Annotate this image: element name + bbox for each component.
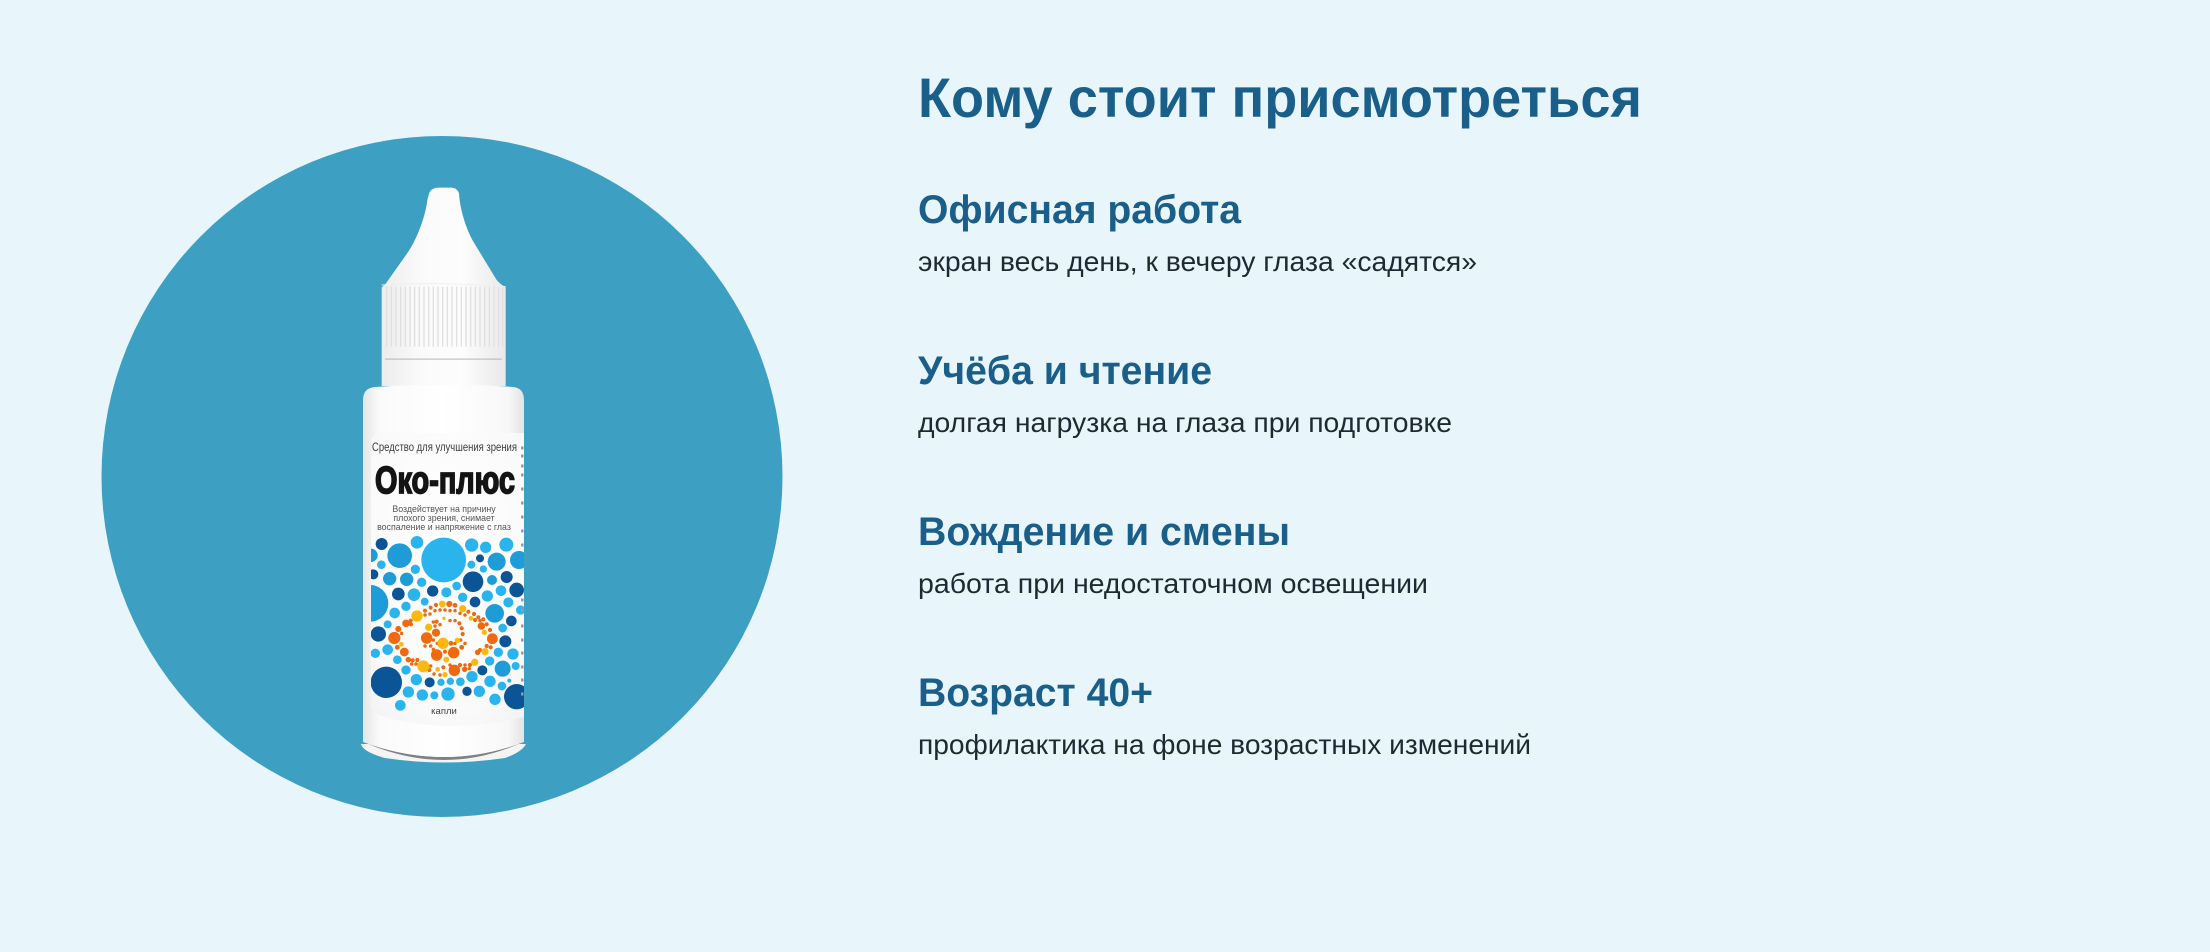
eye: yellow dots [399, 601, 488, 677]
lower dots [371, 601, 529, 711]
bottle base rim [361, 744, 526, 762]
label description: плохого зрения, снимает [393, 513, 495, 523]
label side small print [521, 448, 524, 694]
bottle body [363, 385, 524, 757]
item description: экран весь день, к вечеру глаза «садятся» [918, 246, 1477, 277]
item description: долгая нагрузка на глаза при подготовке [918, 407, 1452, 438]
item: driving and shifts [918, 510, 1428, 599]
bottle dropper tip and cap [382, 188, 506, 387]
item: office work [918, 188, 1477, 277]
label volume text: капли [431, 706, 457, 717]
teal circle behind product [102, 136, 782, 817]
label top text: Средство для улучшения зрения [372, 442, 517, 454]
label dot pattern with eye [371, 536, 524, 711]
label description: Воздействует на причину [392, 504, 496, 514]
label description [377, 504, 511, 532]
label description: воспаление и напряжение с глаз [377, 522, 511, 532]
eye: orange dots [389, 601, 497, 676]
item: study and reading [918, 349, 1452, 438]
item heading: Учёба и чтение [918, 349, 1212, 393]
item description: работа при недостаточном освещении [918, 568, 1428, 599]
bottle base shadow [366, 743, 521, 760]
item heading: Офисная работа [918, 188, 1242, 232]
item heading: Вождение и смены [918, 510, 1290, 554]
item heading: Возраст 40+ [918, 671, 1153, 715]
label background [371, 433, 524, 726]
item description: профилактика на фоне возрастных изменений [918, 729, 1531, 760]
product name: Око-плюс [375, 460, 515, 502]
item: age 40+ [918, 671, 1531, 760]
upper dots [371, 536, 524, 642]
product bottle: Око-плюс [352, 188, 529, 762]
main title: Кому стоит присмотреться [918, 66, 1642, 129]
